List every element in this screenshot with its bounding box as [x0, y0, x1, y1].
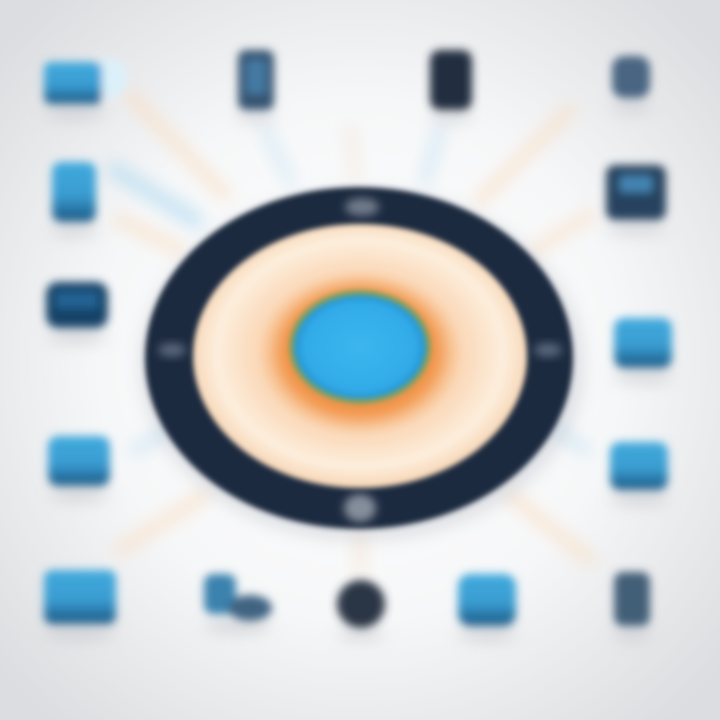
orange halo: [278, 286, 442, 418]
ring node: bottom: [344, 494, 376, 522]
connector rays: [115, 95, 590, 570]
icon shadows: [44, 100, 673, 641]
icon: right blue card: [614, 318, 672, 368]
icon: left dark card: [46, 282, 108, 328]
icon: top dark phone: [430, 50, 472, 110]
icon: bottom left card: [44, 570, 116, 624]
dark outer ring: [145, 187, 573, 529]
icon: bottom blue card: [458, 574, 516, 626]
ring node: right: [534, 343, 562, 357]
central hub: [140, 187, 584, 541]
ring node: left: [158, 343, 186, 357]
icon: bottom right phone: [614, 572, 650, 626]
icon: upper left tablet: [52, 162, 96, 222]
icon: lower left card: [48, 436, 110, 486]
icon: top right dot: [612, 56, 650, 98]
hub shadow: [140, 189, 584, 541]
ring node: top: [345, 198, 379, 216]
peach inner disc: [193, 224, 527, 488]
icon: bottom dark circle: [337, 580, 385, 628]
blue centre: [294, 295, 426, 399]
green edge: [289, 290, 431, 404]
icon: upper right monitor: [606, 165, 666, 220]
icon: bottom devices: [204, 574, 272, 621]
icon: top phone: [238, 50, 274, 110]
icon: top left card: [44, 58, 128, 104]
icon: lower right card: [610, 442, 668, 490]
